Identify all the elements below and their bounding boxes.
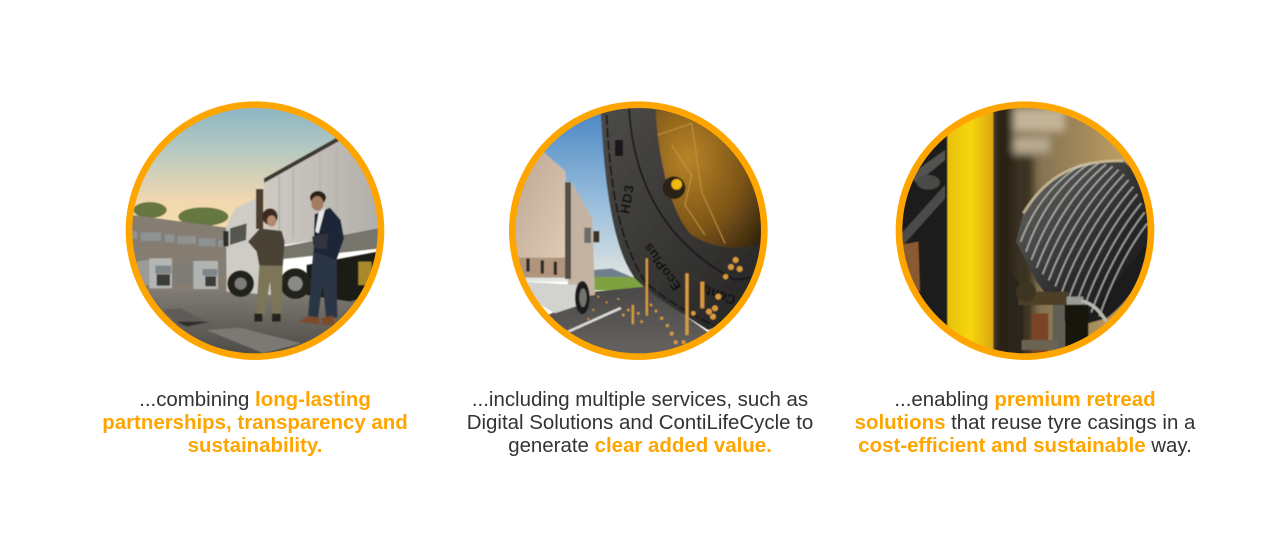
orange ring: [129, 105, 381, 357]
caption: retread: cost-efficient and sustainable way.: [858, 434, 1192, 457]
trailer deck and chassis: [283, 227, 387, 259]
trailer: [264, 141, 378, 245]
ground: [148, 290, 356, 354]
warehouse: [127, 214, 227, 292]
yellow column: [947, 108, 993, 365]
lettering on tyre: HD3: [617, 183, 637, 215]
tyre: [600, 108, 760, 331]
photo: two people talking beside a truck: [126, 101, 384, 360]
fittings: [1014, 276, 1024, 353]
cab: [226, 189, 273, 295]
cable spool: [1016, 161, 1153, 328]
factory background: [992, 108, 1132, 354]
tread lugs: [607, 115, 713, 325]
caption: partnerships: partnerships, transparency and: [102, 411, 408, 434]
caption: services: generate clear added value.: [508, 434, 772, 457]
caption: services: Digital Solutions and ContiLifeCycle to: [467, 411, 813, 434]
blurred lights: [993, 102, 1065, 365]
rim pattern: [658, 123, 725, 243]
wheels: [227, 268, 311, 299]
caption: partnerships: [102, 388, 408, 457]
person: woman: [248, 208, 285, 322]
data glow bars and dots: [587, 257, 743, 344]
caption: retread: solutions that reuse tyre casings in a: [855, 411, 1195, 434]
orange ring: [512, 105, 764, 357]
orange ring: [899, 105, 1151, 357]
truck cab: [566, 182, 595, 298]
landscape: [593, 268, 633, 278]
sky: [133, 108, 336, 228]
caption: partnerships: ...combining long-lasting: [139, 388, 371, 411]
photo: tyre with sensor and truck on the road: EcoPlus: [640, 240, 684, 294]
caption: services: ...including multiple services, such as: [472, 388, 808, 411]
photo: tyre with sensor and truck on the road: Conti: [701, 282, 738, 308]
sidewall groove: [628, 108, 752, 281]
caption: retread: [855, 388, 1196, 457]
caption: retread: ...enabling premium retread: [894, 388, 1156, 411]
caption: services: [467, 388, 813, 457]
person: man: [299, 191, 344, 325]
dark machinery left: [902, 136, 948, 326]
road: [548, 287, 712, 365]
caption: partnerships: sustainability.: [188, 434, 322, 457]
photo: coil of cable in a retread machine: [890, 95, 1160, 365]
illustrations: three circular photos: [126, 101, 1154, 360]
wheel rim: [656, 110, 763, 247]
trees: [133, 202, 228, 226]
sensor: [663, 176, 685, 199]
photo: tyre with sensor and truck on the road: [505, 95, 778, 365]
spool rim highlight: [1023, 161, 1123, 213]
truck trailer: [516, 152, 566, 258]
spool highlights: [1021, 163, 1147, 316]
sky: [525, 108, 646, 282]
background trucks: [137, 258, 218, 289]
